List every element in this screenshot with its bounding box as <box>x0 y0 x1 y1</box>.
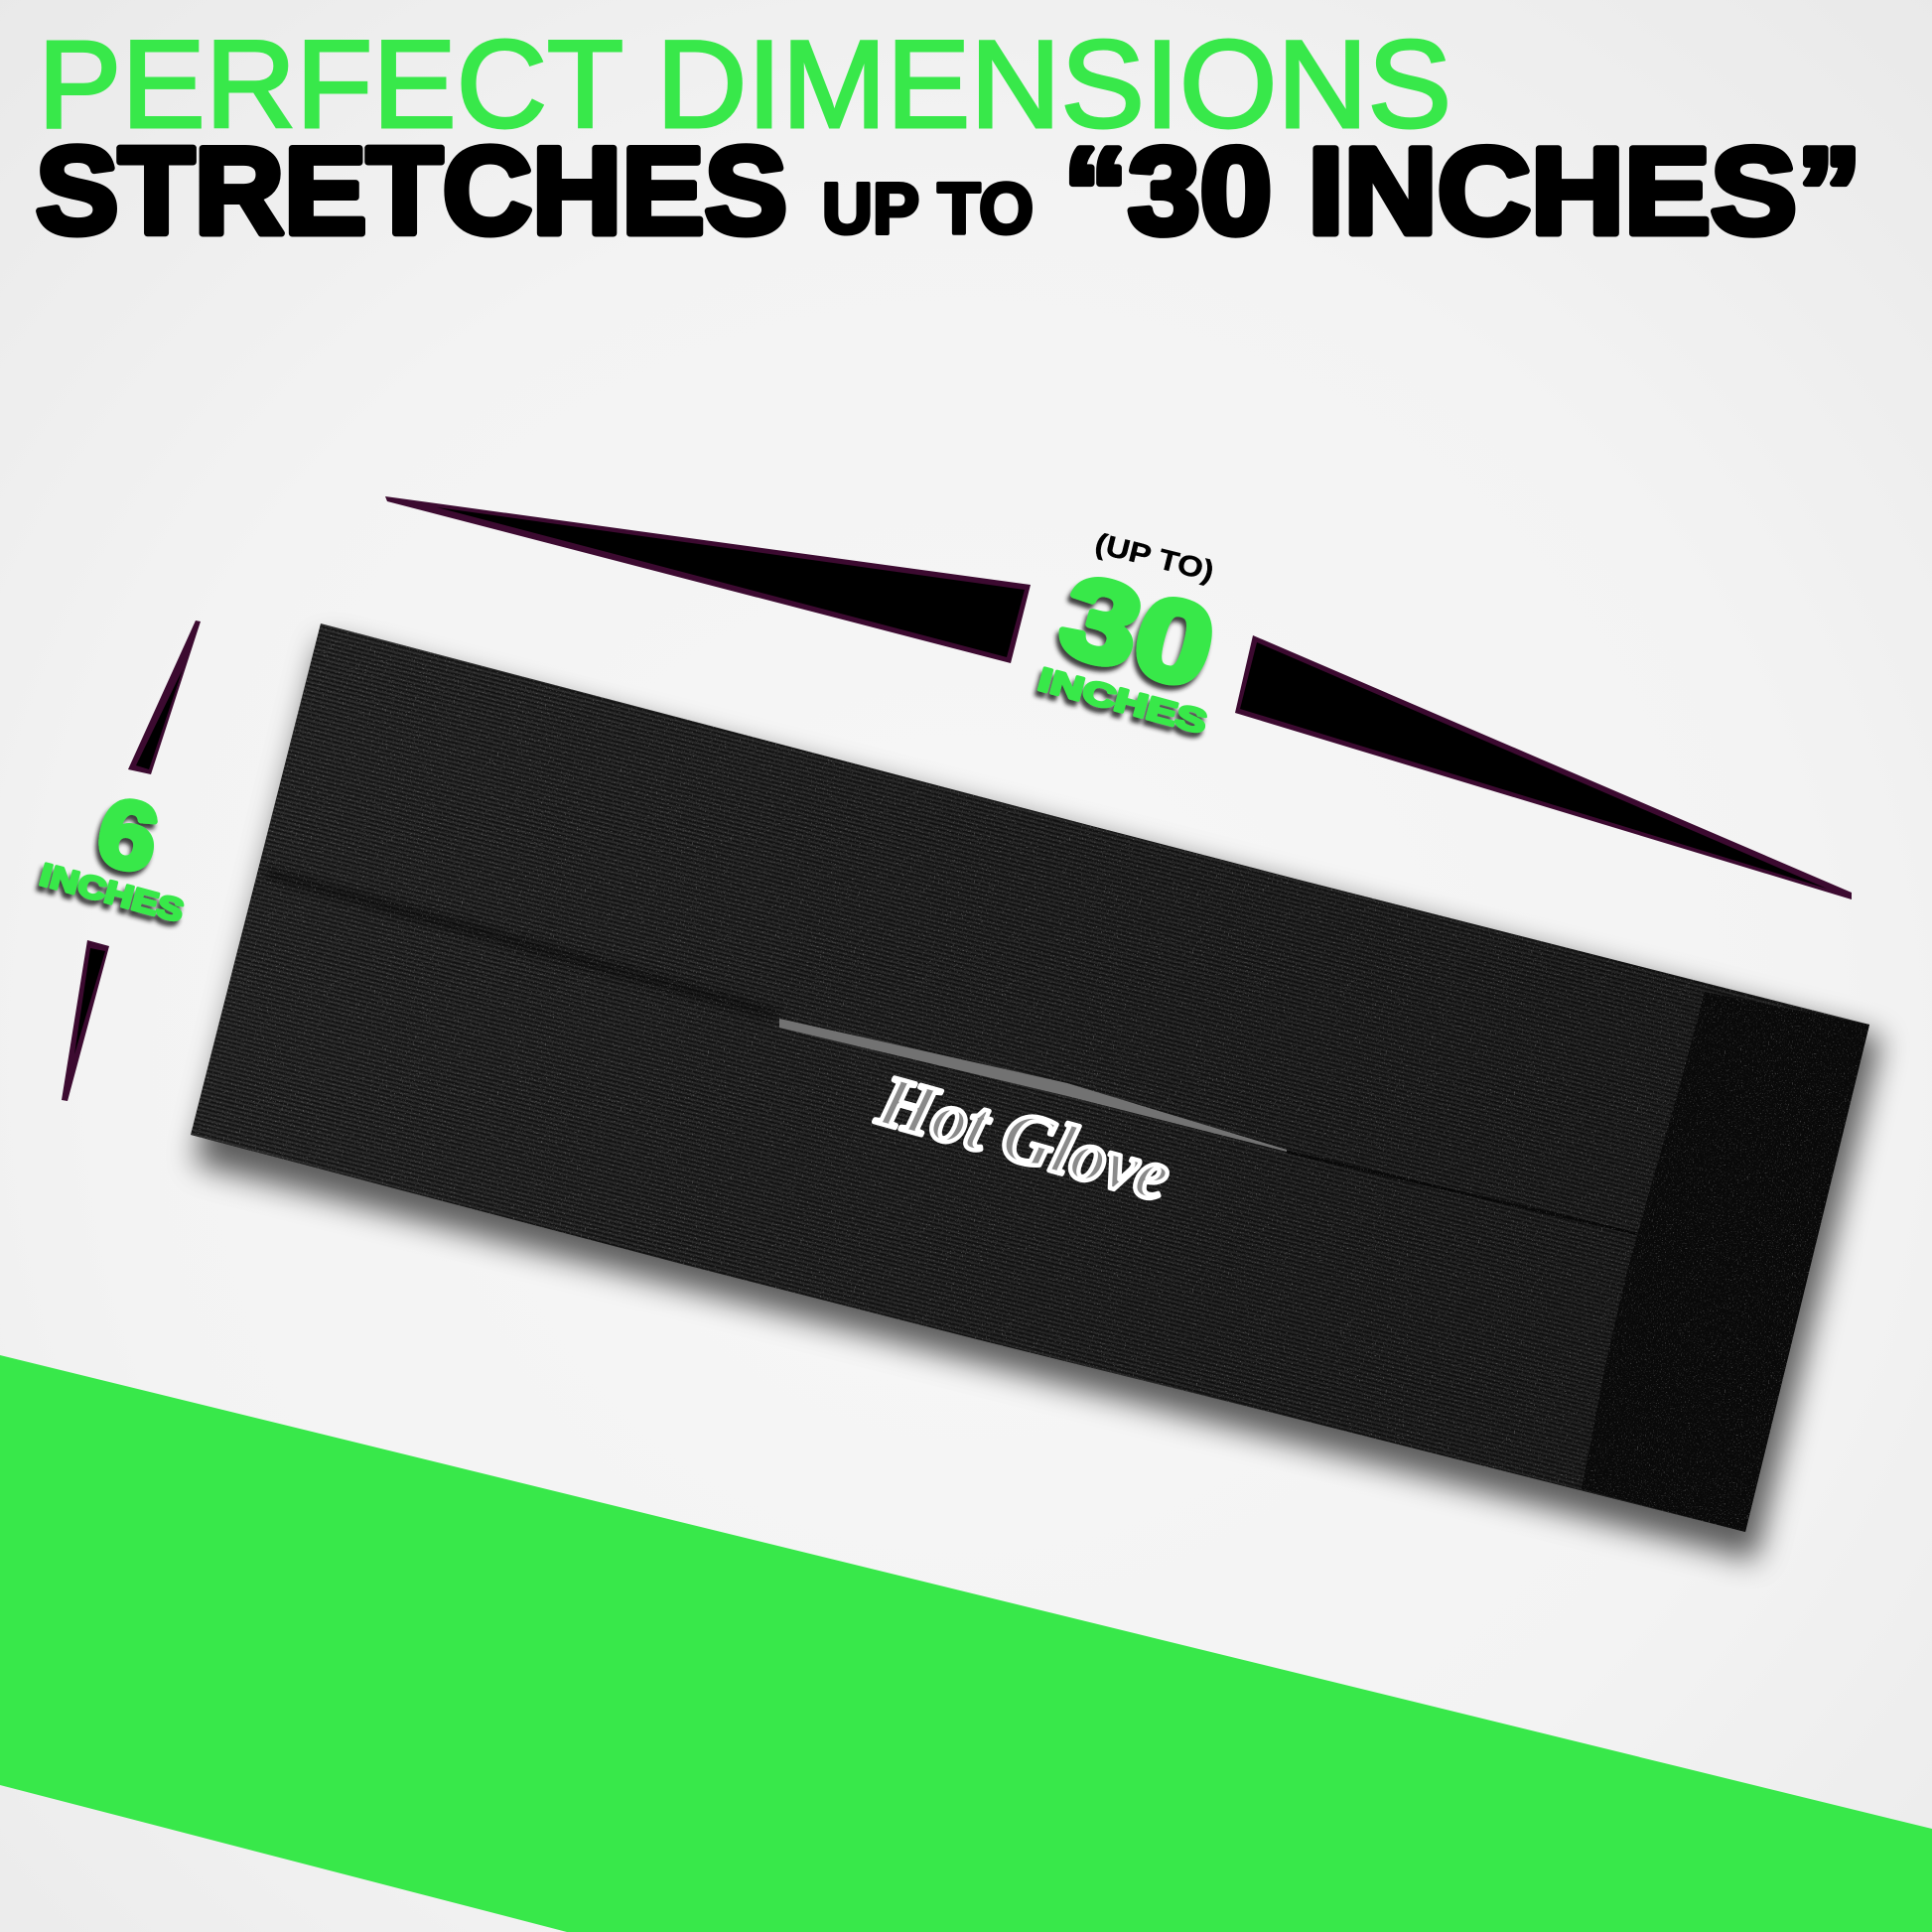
green diagonal band <box>0 1355 1932 1932</box>
arrow: lower width wedge <box>62 940 109 1101</box>
band shading <box>191 623 1869 1532</box>
arrow: left top length wedge <box>385 496 1031 663</box>
band shadow <box>195 640 1881 1561</box>
logo: hot glove: Hot Glove <box>869 1059 1178 1218</box>
velcro patch <box>1582 992 1869 1532</box>
number 30: 30 <box>1048 550 1227 713</box>
inches text: INCHES <box>1035 660 1211 741</box>
slit highlight <box>779 1019 1287 1152</box>
number 6: 6 <box>88 777 167 894</box>
up to text: (UP TO) <box>1092 528 1217 588</box>
right seam <box>1287 1152 1638 1234</box>
arrow: upper width wedge <box>128 621 201 774</box>
label: up to 30 inches <box>1035 528 1227 741</box>
title <box>36 16 1862 260</box>
heading line: stretches up to 30 inches: UP TO <box>822 170 1034 249</box>
label: 6 inches <box>37 777 188 929</box>
fold seam <box>266 873 776 1015</box>
heading line: perfect dimensions: PERFECT DIMENSIONS <box>38 16 1451 154</box>
heading line: stretches up to 30 inches <box>36 123 1862 260</box>
band fabric <box>191 623 1869 1532</box>
inches text: INCHES <box>37 856 188 929</box>
heading line: stretches up to 30 inches: STRETCHES <box>36 123 787 260</box>
fabric speckle <box>149 596 1896 1559</box>
heading line: stretches up to 30 inches: “30 INCHES” <box>1063 123 1862 260</box>
product: black elastic band <box>149 596 1896 1561</box>
arrow: right top length wedge <box>1235 635 1852 899</box>
